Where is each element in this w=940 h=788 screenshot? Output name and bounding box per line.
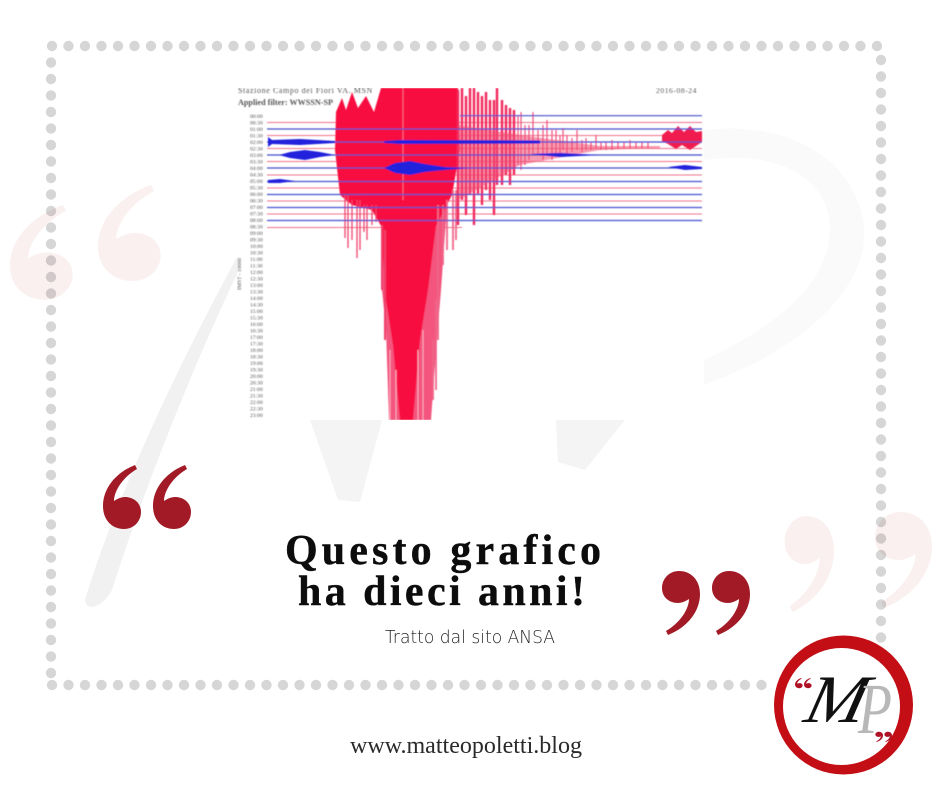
trace lines red <box>267 122 702 228</box>
time axis labels: 14:00 <box>250 296 263 302</box>
time axis labels: 14:30 <box>250 302 263 308</box>
time axis labels: 03:30 <box>250 160 263 166</box>
red decay spikes <box>458 88 648 225</box>
time axis labels: 08:30 <box>250 224 263 230</box>
trace lines blue <box>267 116 702 220</box>
time axis labels: 04:00 <box>250 166 263 172</box>
time axis labels: 05:00 <box>250 179 263 185</box>
time axis labels: 04:30 <box>250 172 263 178</box>
time axis labels: 10:00 <box>250 244 263 250</box>
time axis labels: 22:00 <box>250 400 263 406</box>
time axis labels: 03:00 <box>250 153 263 159</box>
time axis labels: 00:00 <box>250 114 263 120</box>
time axis labels: 11:30 <box>250 264 263 270</box>
time axis labels: 15:00 <box>250 309 263 315</box>
red aftershock burst at right <box>662 126 702 150</box>
time axis labels: 12:00 <box>250 270 263 276</box>
time axis labels: 17:30 <box>250 342 263 348</box>
logo: M <box>797 661 881 737</box>
chart header text: Stazione Campo dei Fiori VA. MSN <box>238 86 373 95</box>
time axis labels: 22:30 <box>250 406 263 412</box>
time axis labels: 01:30 <box>250 134 263 140</box>
time axis labels: 09:00 <box>250 231 263 237</box>
background watermark: large logo and quotes <box>10 128 932 612</box>
opening quotation mark <box>103 465 191 529</box>
time axis labels: 02:30 <box>250 146 263 152</box>
time axis labels: 16:00 <box>250 322 263 328</box>
time axis labels: 02:00 <box>250 140 263 146</box>
closing quotation mark <box>662 571 750 635</box>
time axis labels: 15:30 <box>250 316 263 322</box>
time axis labels: 23:00 <box>250 413 263 419</box>
time axis labels: 01:00 <box>250 127 263 133</box>
time axis labels: 20:00 <box>250 374 263 380</box>
title <box>285 528 601 615</box>
seismograph chart image <box>237 86 704 420</box>
chart header text <box>238 86 697 107</box>
time axis labels: 21:00 <box>250 387 263 393</box>
time axis labels: 06:00 <box>250 192 263 198</box>
time axis labels: 10:30 <box>250 250 263 256</box>
time axis labels: 13:30 <box>250 290 263 296</box>
title: Questo grafico <box>285 528 601 574</box>
time axis labels: 12:30 <box>250 276 263 282</box>
time axis labels: 19:30 <box>250 368 263 374</box>
time axis labels: 00:30 <box>250 120 263 126</box>
time axis labels: 07:00 <box>250 205 263 211</box>
time axis labels: 05:30 <box>250 186 263 192</box>
time axis labels <box>237 114 263 419</box>
time axis labels: 18:00 <box>250 348 263 354</box>
time axis labels: 13:00 <box>250 283 263 289</box>
website url: www.matteopoletti.blog <box>350 733 582 759</box>
title: ha dieci anni! <box>298 569 585 615</box>
time axis labels: 17:00 <box>250 335 263 341</box>
time axis labels: IMST - 10000 <box>237 258 243 290</box>
logo <box>774 636 913 774</box>
logo: P <box>857 669 892 749</box>
time axis labels: 21:30 <box>250 394 263 400</box>
time axis labels: 11:00 <box>250 257 263 263</box>
time axis labels: 18:30 <box>250 354 263 360</box>
time axis labels: 06:30 <box>250 198 263 204</box>
chart header text: Applied filter: WWSSN-SP <box>238 97 333 107</box>
source caption: Tratto dal sito ANSA <box>385 627 555 648</box>
time axis labels: 20:30 <box>250 380 263 386</box>
time axis labels: 07:30 <box>250 212 263 218</box>
time axis labels: 09:30 <box>250 238 263 244</box>
blue bursts <box>268 137 702 183</box>
dotted frame <box>46 41 886 690</box>
time axis labels: 16:30 <box>250 328 263 334</box>
red burst: main shock <box>335 88 460 420</box>
time axis labels: 08:00 <box>250 218 263 224</box>
time axis labels: 19:00 <box>250 361 263 367</box>
chart header text: 2016-08-24 <box>656 86 697 95</box>
